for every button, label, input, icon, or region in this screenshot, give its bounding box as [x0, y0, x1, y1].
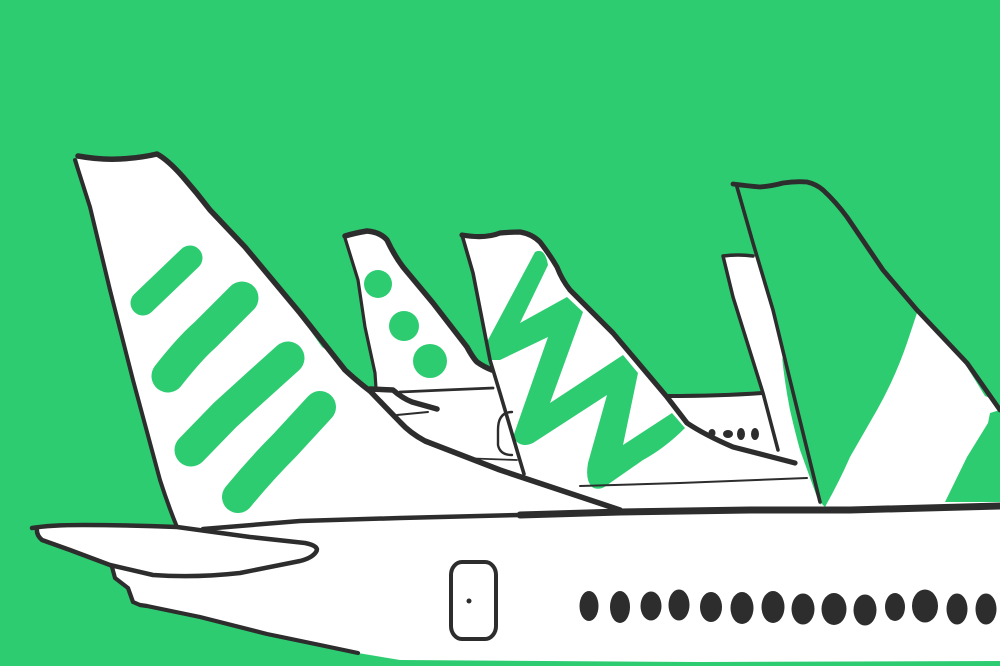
horizontal stabiliser: [32, 525, 317, 576]
tail trailing edge: [462, 235, 524, 474]
front aircraft fuselage: [112, 505, 1000, 662]
zigzag stripe: [488, 251, 685, 489]
tail leading edge: [733, 182, 1000, 410]
sliver along edge: [300, 316, 332, 354]
door: [498, 412, 512, 455]
stripe 2: [168, 298, 242, 376]
stripe 3: [191, 358, 288, 450]
tail trailing edge: [737, 187, 820, 502]
fuselage top line: [203, 506, 1000, 529]
tail: zigzag W livery: [460, 232, 795, 490]
tail leading edge: [345, 231, 492, 370]
door: [451, 562, 496, 639]
passenger windows: [580, 590, 996, 626]
tail base lines: [400, 388, 493, 392]
tail: dotted livery: [345, 231, 523, 473]
tail trailing edge: [345, 238, 376, 388]
tail leading edge: [78, 154, 620, 510]
tail trailing edge: [75, 160, 177, 527]
tail: large green swoosh livery: [733, 182, 1000, 512]
dot 2: [389, 311, 419, 341]
stripe 4: [238, 407, 320, 497]
stripe 1: [143, 258, 190, 303]
thin floor line: [460, 458, 517, 460]
thin body line: [580, 478, 807, 486]
dot 3: [413, 344, 447, 378]
small windows: [708, 428, 759, 440]
tail: stripes livery: [75, 154, 620, 529]
rear aircraft: far right body and small tail: [375, 255, 830, 520]
fuselage underside: [112, 567, 358, 653]
tail leading edge: [462, 232, 795, 463]
dot 1: [364, 270, 392, 298]
